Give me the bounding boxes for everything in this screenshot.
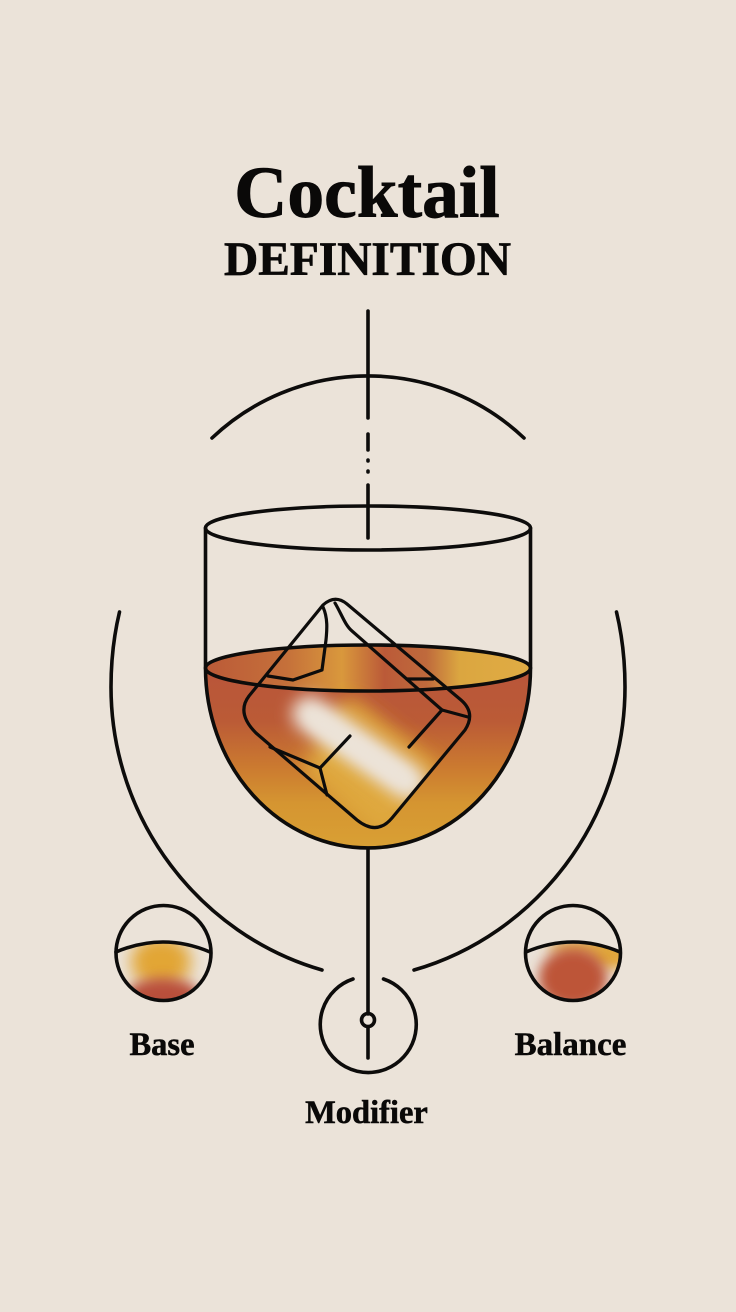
icon: base	[116, 906, 211, 1018]
glass with drink and ice cube	[200, 506, 536, 855]
label: Base: Base	[130, 1027, 194, 1063]
label: Balance: Balance	[515, 1027, 626, 1063]
subtitle: DEFINITION	[224, 234, 511, 286]
liquid surface outline	[206, 645, 530, 691]
top axis line with dashes	[366, 311, 370, 538]
glass wall and bowl	[206, 528, 530, 848]
icon: modifier	[320, 979, 416, 1073]
right outer arc	[414, 612, 625, 970]
title: Cocktail	[234, 152, 500, 233]
icon: balance	[524, 904, 622, 1002]
upper arc	[212, 376, 524, 438]
liquid surface	[216, 646, 529, 690]
glass rim	[206, 506, 530, 550]
ice cube glow	[300, 700, 440, 840]
ice cube outline	[244, 599, 470, 828]
left outer arc	[111, 612, 322, 970]
label: Modifier: Modifier	[305, 1095, 428, 1131]
ice cube facets	[268, 603, 468, 795]
liquid body	[207, 674, 529, 846]
stem line	[366, 850, 370, 1014]
